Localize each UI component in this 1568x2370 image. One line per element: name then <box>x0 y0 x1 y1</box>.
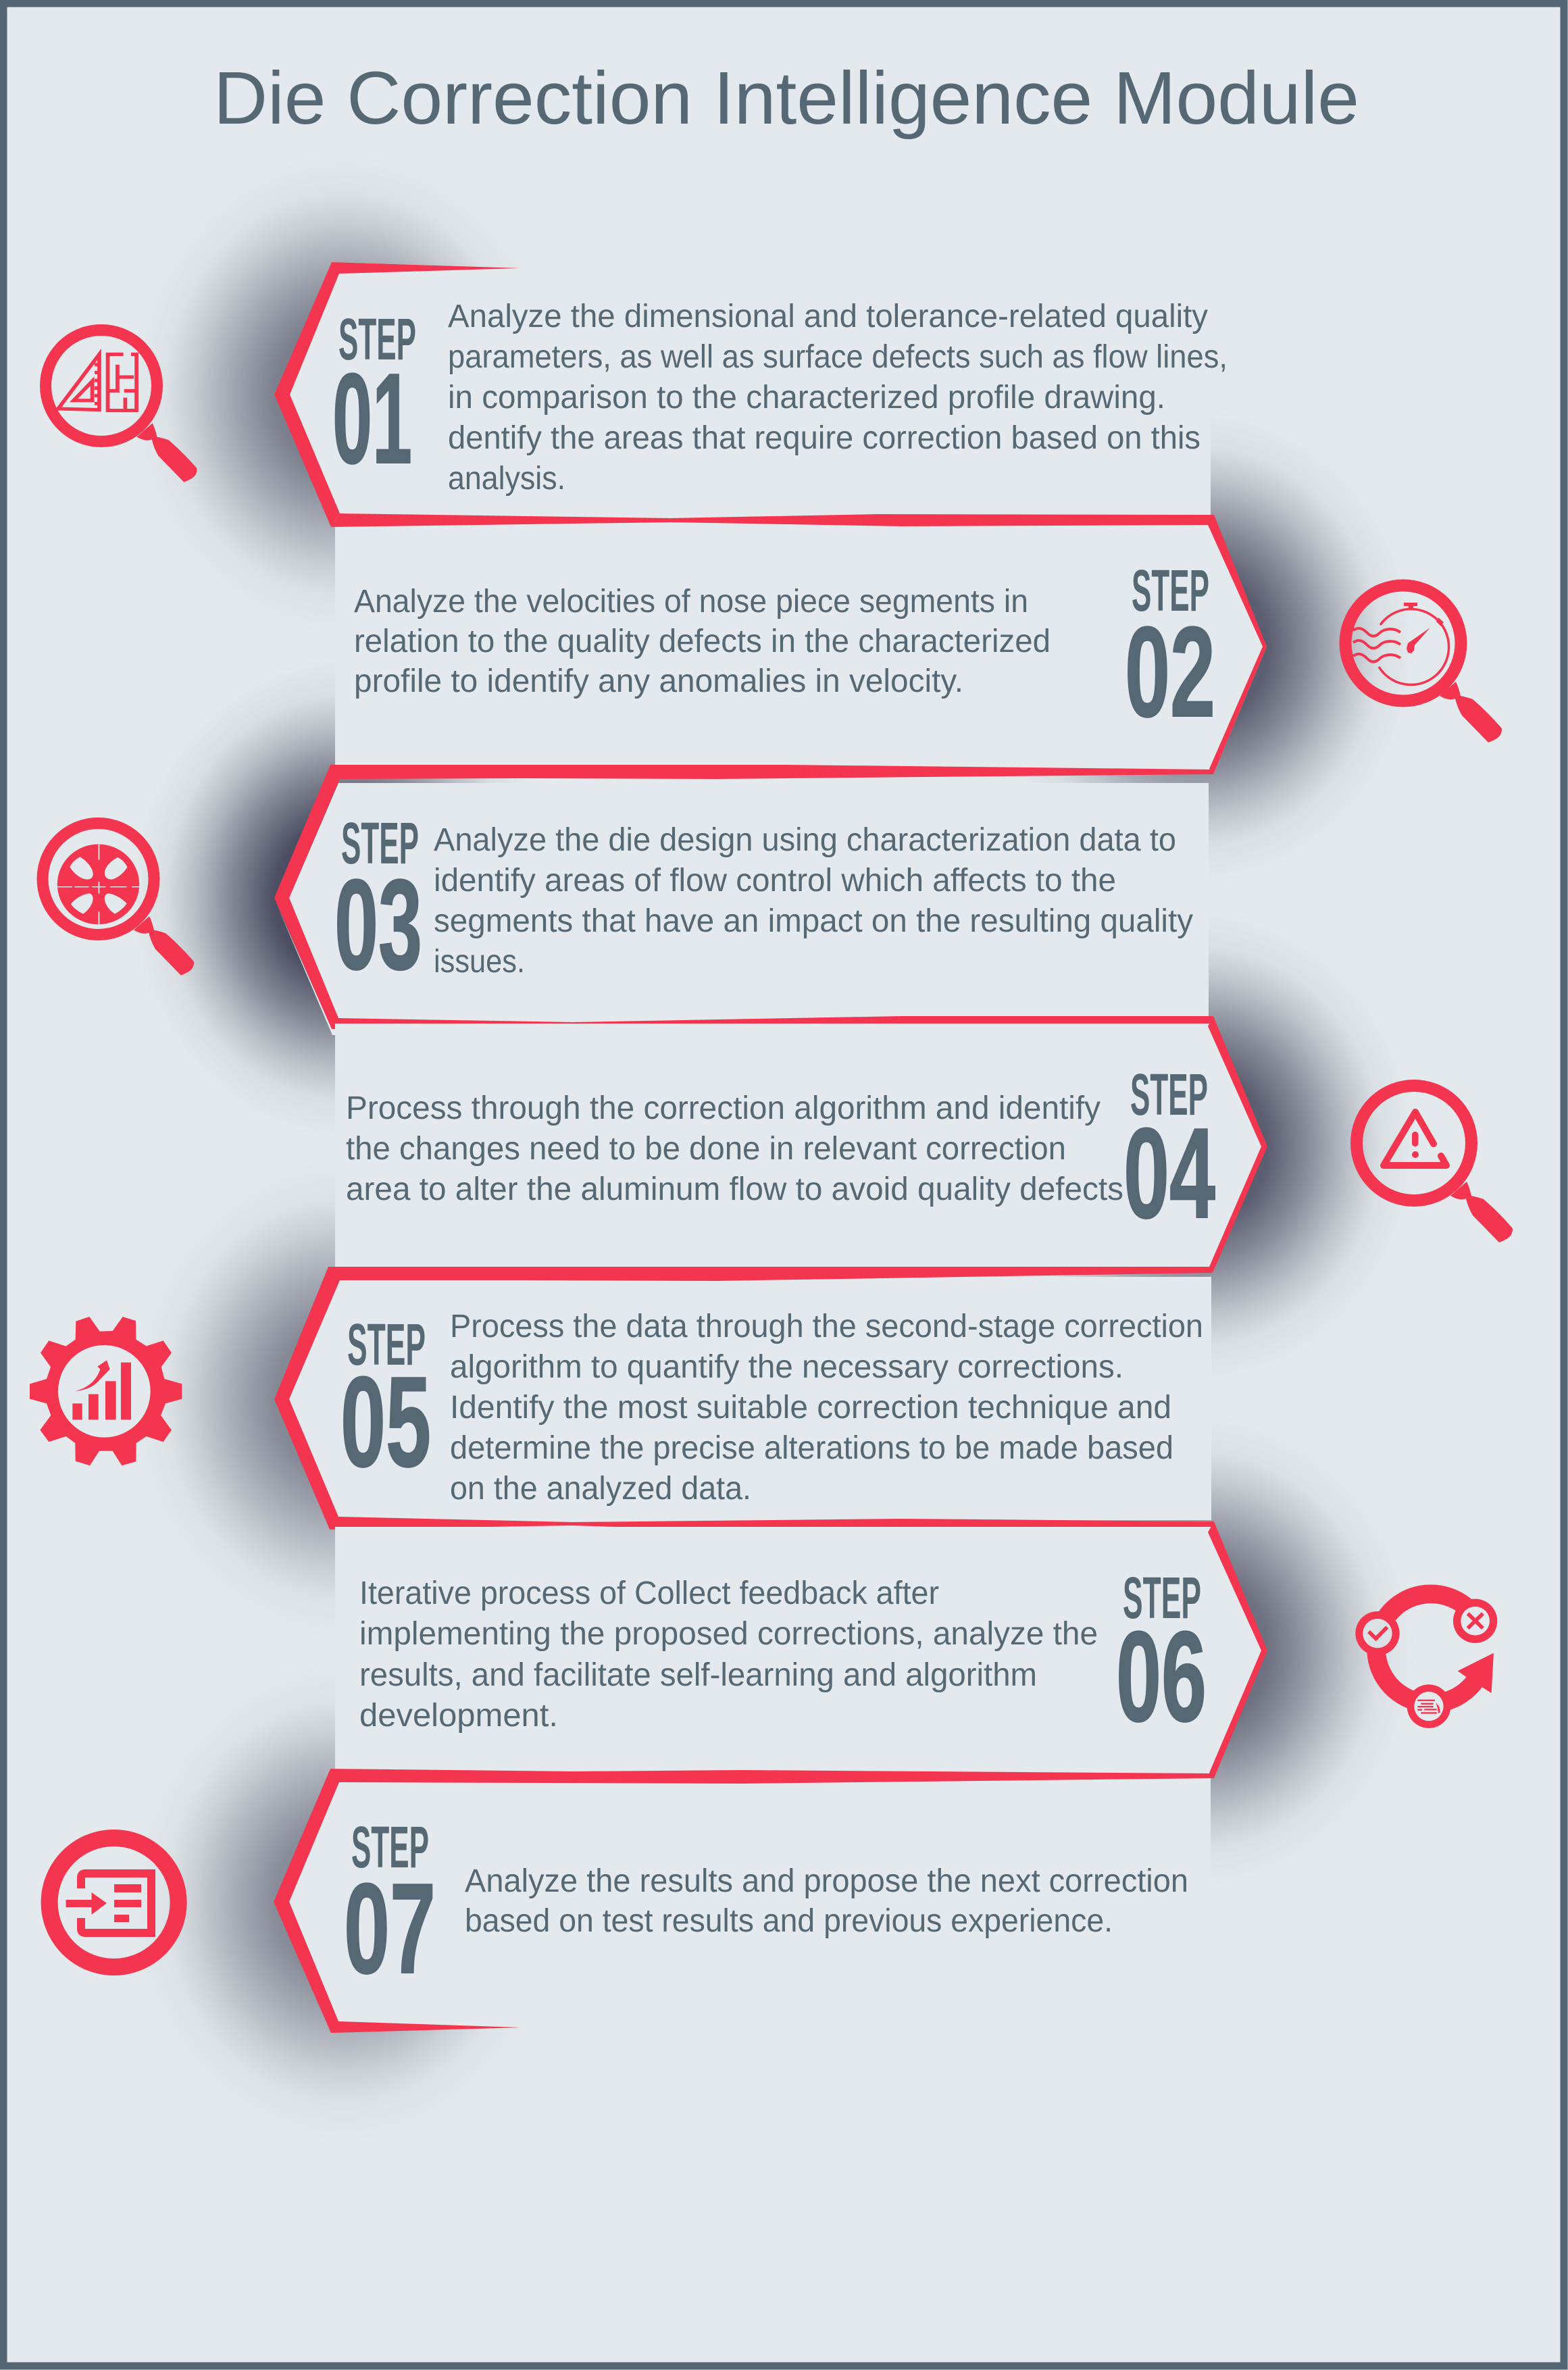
panel: step 2 <box>331 513 1267 774</box>
panel: step 4: Process through the correction algorithm and identify <box>346 1090 1101 1126</box>
panel: step 7: Analyze the results and propose the next correction <box>465 1863 1188 1899</box>
panel: step 1: Analyze the dimensional and tolerance-related quality <box>448 299 1208 334</box>
panel: step 1: dentify the areas that require correction based on this <box>448 420 1200 456</box>
icon: magnifier with warning triangle <box>1357 1086 1513 1242</box>
icon: magnifier with die wheel <box>43 823 194 976</box>
panel: step 1: in comparison to the characterized profile drawing. <box>448 380 1165 415</box>
panel: step 7 <box>274 1769 1214 2033</box>
panel: step 5: 05 <box>340 1351 431 1494</box>
title: Die Correction Intelligence Module <box>213 57 1359 140</box>
panel: step 1: parameters, as well as surface defects such as flow lines, <box>448 339 1228 375</box>
panel: step 7: STEP <box>351 1815 429 1880</box>
panel: step 6: implementing the proposed corrections, analyze the <box>359 1616 1098 1652</box>
panel: step 1: 01 <box>332 347 412 490</box>
panel: step 4: STEP <box>1130 1062 1208 1128</box>
panel: step 5: Process the data through the second-stage correction <box>450 1309 1203 1344</box>
panel: step 1: STEP <box>338 307 416 372</box>
panel: step 1: analysis. <box>448 461 565 497</box>
panel: step 3: 03 <box>334 853 422 997</box>
panel: step 4: the changes need to be done in relevant correction <box>346 1131 1066 1167</box>
panel: step 5: determine the precise alterations to be made based <box>450 1430 1173 1466</box>
panel: step 7: 07 <box>344 1857 436 2000</box>
panel: step 2: profile to identify any anomalies in velocity. <box>354 663 963 699</box>
panel: step 5: on the analyzed data. <box>450 1471 751 1507</box>
panel: step 5: algorithm to quantify the necessary corrections. <box>450 1349 1123 1385</box>
panel: step 5 <box>274 1267 1214 1535</box>
panel: step 4 <box>335 1016 1267 1273</box>
panel: step 4: area to alter the aluminum flow to avoid quality defects <box>346 1171 1123 1207</box>
panel: step 2: STEP <box>1132 558 1209 624</box>
icon: input list in a ring <box>49 1838 178 1967</box>
panel: step 6: results, and facilitate self-learning and algorithm <box>359 1657 1037 1693</box>
panel: step 7: based on test results and previous experience. <box>465 1903 1113 1939</box>
panel: step 3 <box>274 765 1213 1035</box>
panel: step 2: Analyze the velocities of nose piece segments in <box>354 584 1028 620</box>
panel: step 6: 06 <box>1116 1605 1207 1748</box>
panel: step 5: Identify the most suitable correction technique and <box>450 1390 1171 1426</box>
panel: step 6 <box>335 1521 1267 1778</box>
panel: step 2: 02 <box>1125 601 1215 744</box>
panel: step 3: issues. <box>434 944 525 980</box>
panel: step 5: STEP <box>347 1312 426 1378</box>
panel: step 6: development. <box>359 1698 558 1734</box>
icon: feedback cycle with check, cross and document <box>1355 1594 1497 1728</box>
icon: magnifier with stopwatch and flow waves <box>1346 585 1502 742</box>
panel: step 1 <box>274 262 1228 527</box>
panel: step 3: segments that have an impact on the resulting quality <box>434 903 1193 939</box>
panel: step 3: STEP <box>341 811 419 876</box>
panel: step 4: 04 <box>1123 1102 1215 1245</box>
icon: magnifier with drawing tools <box>46 330 197 482</box>
panel: step 6: STEP <box>1123 1565 1201 1631</box>
shadows behind the step panels <box>132 155 1415 2142</box>
icon: gear with rising bar chart <box>30 1317 182 1465</box>
panel: step 3: Analyze the die design using characterization data to <box>434 822 1176 858</box>
panel: step 2: relation to the quality defects in the characterized <box>354 624 1051 659</box>
panel: step 3: identify areas of flow control which affects to the <box>434 863 1116 899</box>
panel: step 6: Iterative process of Collect feedback after <box>359 1575 939 1611</box>
